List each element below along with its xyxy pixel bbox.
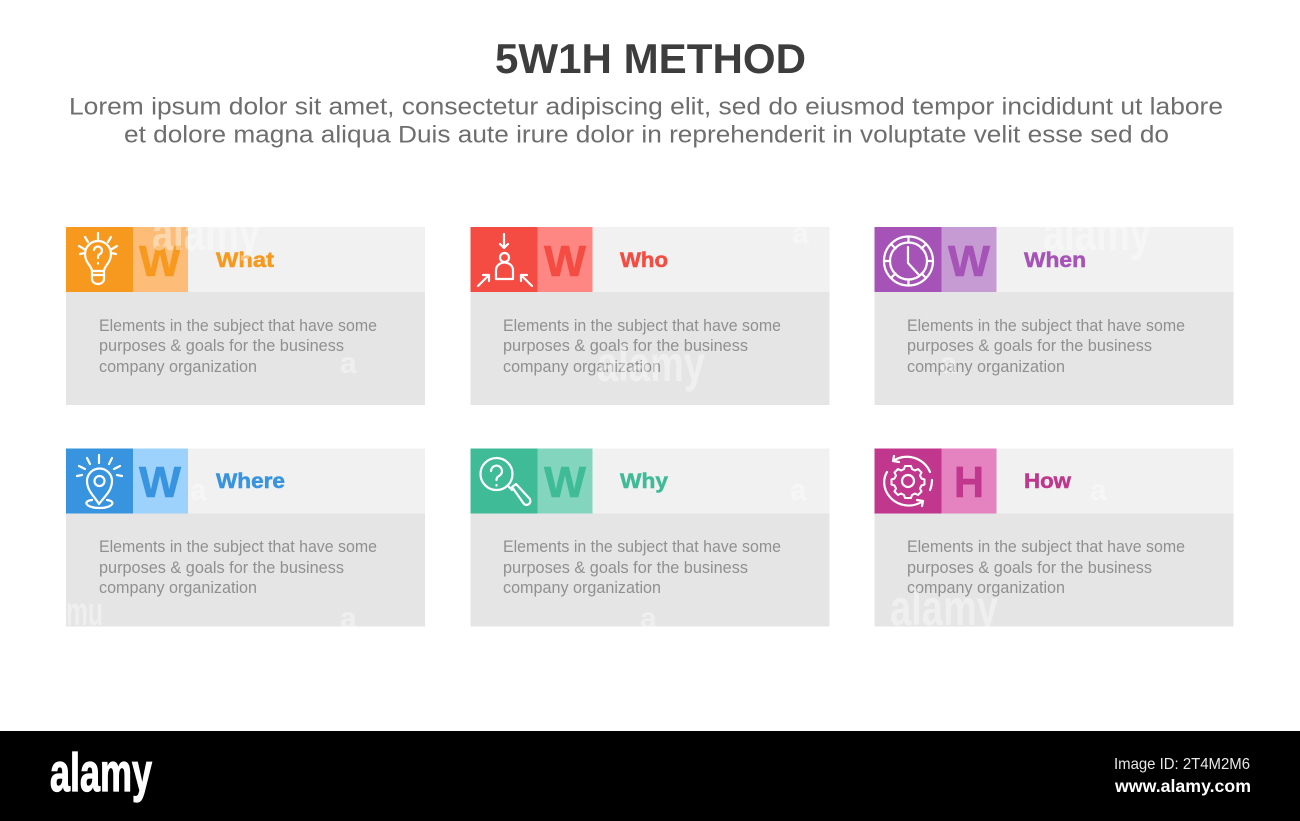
description: how: Elements in the subject that have some (907, 538, 1185, 556)
panel: why (470, 448, 830, 626)
watermarks: alamy (152, 205, 260, 261)
description: what: Elements in the subject that have some (99, 317, 377, 335)
subtitle text: et dolore magna aliqua Duis aute irure dolor in reprehenderit in voluptate velit esse sed do (124, 122, 1169, 148)
footer bar (0, 731, 1300, 821)
description: when: purposes & goals for the business (907, 337, 1152, 355)
description: why: purposes & goals for the business (503, 559, 748, 577)
panel: how: How (1024, 470, 1072, 493)
description: why (503, 538, 781, 597)
title: 5W1H METHOD (495, 35, 806, 82)
description: when: company organization (907, 358, 1065, 376)
watermarks: a (792, 217, 809, 250)
description: who (503, 317, 781, 376)
description: when: Elements in the subject that have some (907, 317, 1185, 335)
watermarks: a (790, 474, 807, 507)
panel: what: What (216, 249, 274, 272)
description: how (907, 538, 1185, 597)
panel: why: Why (620, 470, 668, 493)
description: who: Elements in the subject that have some (503, 317, 781, 335)
panel: when: W (948, 237, 990, 286)
watermarks: a (1090, 474, 1107, 507)
panel: how: H (954, 458, 984, 507)
icon: location pin with rays (77, 455, 122, 508)
description: who: purposes & goals for the business (503, 337, 748, 355)
watermarks: a (190, 474, 207, 507)
description: what: company organization (99, 358, 257, 376)
description: who: company organization (503, 358, 661, 376)
watermarks: mu (66, 590, 103, 634)
watermarks: alamy (890, 580, 998, 636)
description: when (907, 317, 1185, 376)
description: why: Elements in the subject that have some (503, 538, 781, 556)
panel: why: W (544, 458, 586, 507)
watermarks: a (340, 602, 357, 635)
panel: who: W (544, 237, 586, 286)
description: where (99, 538, 377, 597)
description: what: purposes & goals for the business (99, 337, 344, 355)
description: what (99, 317, 377, 376)
subtitle text (69, 94, 1223, 148)
icon: person with arrows (478, 234, 532, 286)
panel: when: When (1024, 249, 1086, 272)
panel: what (66, 227, 425, 405)
description: where: purposes & goals for the business (99, 559, 344, 577)
watermarks: a (940, 347, 957, 380)
panel: where: W (139, 458, 181, 507)
panel: where: Where (216, 470, 285, 493)
watermarks: alamy (1043, 205, 1151, 261)
image id: Image ID: 2T4M2M6 (1114, 756, 1250, 773)
footer logo: alamy (50, 743, 152, 803)
panel: when (874, 227, 1234, 405)
subtitle text: Lorem ipsum dolor sit amet, consectetur adipiscing elit, sed do eiusmod tempor incididunt ut labore (69, 94, 1223, 120)
icon: magnifier with question mark (480, 458, 530, 505)
watermarks: a (640, 602, 657, 635)
watermarks (66, 205, 1151, 636)
watermarks: a (340, 347, 357, 380)
icon: light bulb with question mark (79, 233, 117, 284)
description: where: company organization (99, 579, 257, 597)
description: how: purposes & goals for the business (907, 559, 1152, 577)
website: www.alamy.com (1114, 776, 1251, 796)
description: how: company organization (907, 579, 1065, 597)
watermarks: alamy (597, 336, 705, 392)
description: why: company organization (503, 579, 661, 597)
panel: how (874, 448, 1234, 626)
icon: clock (884, 236, 933, 286)
panel: who: Who (620, 249, 668, 272)
panel: what: W (139, 237, 181, 286)
icon: gear with cycle arrows (884, 456, 932, 506)
description: where: Elements in the subject that have some (99, 538, 377, 556)
panel: who (470, 227, 830, 405)
panel: where (66, 448, 425, 626)
